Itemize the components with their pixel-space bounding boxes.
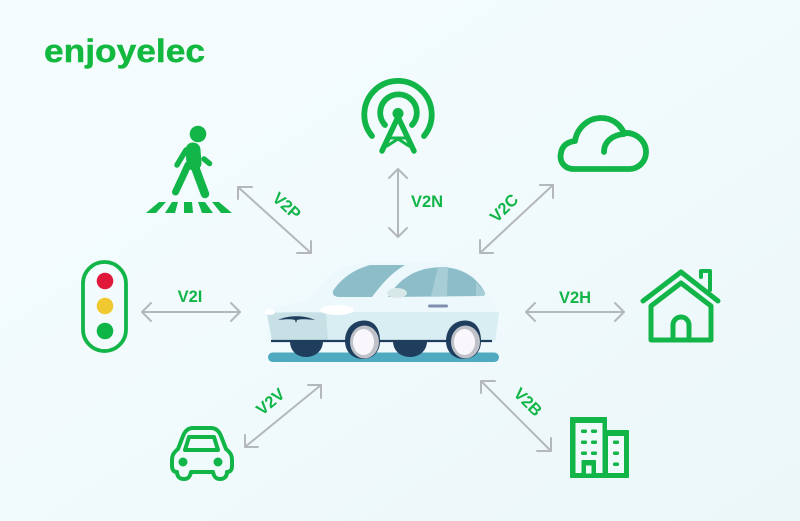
headlights: [320, 305, 354, 315]
arrow: V2I: [142, 303, 240, 321]
logo mark on the nose: [278, 316, 315, 323]
grille panel: [267, 312, 328, 340]
front wheel: [345, 320, 380, 359]
underbody line: [271, 340, 492, 342]
car lower body: [267, 312, 499, 341]
car upper body: [268, 261, 499, 341]
mirror: [387, 288, 407, 298]
label: V2P: V2P: [269, 189, 304, 223]
label: V2I: V2I: [178, 288, 202, 306]
arrow: V2C: [480, 185, 553, 253]
door handle: [428, 304, 448, 308]
arrow: V2B: [481, 381, 551, 451]
icon: house: [643, 271, 718, 340]
label: V2V: V2V: [253, 385, 289, 419]
label: V2N: V2N: [411, 193, 443, 211]
icon: small car: [172, 428, 232, 479]
rear wheel: [446, 320, 481, 359]
label: V2C: V2C: [487, 191, 522, 226]
windscreen: [333, 265, 405, 297]
illustration: central car: [265, 261, 499, 362]
icon: cell tower signal: [364, 81, 432, 151]
icon: traffic light: [83, 262, 126, 351]
icon: office building: [570, 417, 629, 478]
arrow: V2N: [389, 169, 407, 237]
arrow: V2V: [245, 385, 321, 447]
arrow: V2H: [526, 303, 624, 321]
arrow: V2P: [238, 187, 311, 253]
logo: enjoyelec: enjoyelec: [44, 33, 205, 69]
icon: pedestrian on crossing: [146, 126, 232, 213]
window highlight: [431, 267, 448, 296]
label: V2B: V2B: [510, 385, 545, 420]
ground shadow bar: [268, 352, 499, 362]
side window: [388, 267, 485, 297]
dark wheels far side: [290, 341, 427, 357]
icon: cloud: [561, 118, 646, 169]
label: V2H: V2H: [559, 289, 591, 307]
